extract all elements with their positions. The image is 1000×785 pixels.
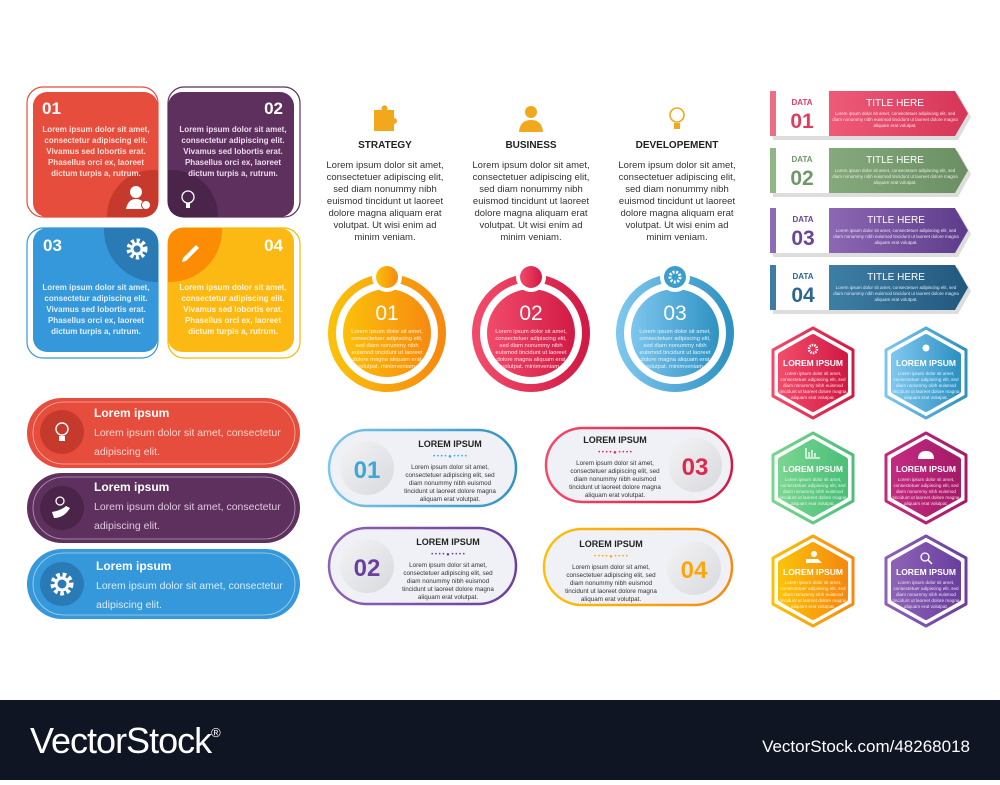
hexagon purple xyxy=(886,536,966,626)
banner 02: DATA xyxy=(791,155,813,164)
banner 01: Lorem ipsum dolor sit amet, consectetuer adipiscing elit, sed xyxy=(835,111,956,116)
circle 03: dolore magna aliquam erat xyxy=(641,357,710,363)
hexagon purple: LOREM IPSUM xyxy=(896,567,956,577)
column strategy: volutpat. Ut wisi enim ad xyxy=(334,220,436,231)
card 03: 03 xyxy=(43,236,62,255)
circle 01: volutpat. minimveniam. xyxy=(357,364,417,370)
hexagon magenta: LOREM IPSUM xyxy=(896,464,956,474)
column development: volutpat. Ut wisi enim ad xyxy=(626,220,728,231)
pill red: adipiscing elit. xyxy=(94,446,160,458)
hexagon blue: aliquam erat volutpat. xyxy=(904,395,948,400)
banner 01: diam nonummy nibh euismod tincidunt ut laoreet dolore magna xyxy=(832,117,958,122)
hexagon green: aliquam erat volutpat. xyxy=(791,501,835,506)
circle 01: consectetuer adipiscing elit, xyxy=(351,336,423,342)
column business: BUSINESS xyxy=(505,140,557,151)
hexagon blue: Lorem ipsum dolor sit amet, xyxy=(898,371,954,376)
card 03: dictum turpis a, rutrum. xyxy=(51,327,141,336)
pill 04: diam nonummy nibh euismod xyxy=(570,580,653,587)
pill 01: LOREM IPSUM xyxy=(418,439,482,449)
banner 03: DATA xyxy=(792,215,814,224)
card 01 xyxy=(26,86,159,218)
pill 03: consectetuer adipiscing elit, sed xyxy=(570,468,660,475)
hexagon purple: diam nonummy nibh euismod xyxy=(896,592,956,597)
column strategy: consectetuer adipiscing elit, xyxy=(327,172,443,183)
card 01: dictum turpis a, rutrum. xyxy=(51,169,141,178)
hexagon red: diam nonummy nibh euismod xyxy=(783,383,843,388)
circle 02: consectetuer adipiscing elit, xyxy=(495,336,567,342)
banner 02: diam nonummy nibh euismod tincidunt ut laoreet dolore magna xyxy=(832,174,958,179)
column business xyxy=(472,106,590,243)
pill 03: diam nonummy nibh euismod xyxy=(574,476,657,483)
column development: sed diam nonummy nibh xyxy=(625,184,729,195)
banner 03: Lorem ipsum dolor sit amet, consectetuer adipiscing elit, sed xyxy=(836,228,957,233)
pill red: Lorem ipsum dolor sit amet, consectetur xyxy=(94,427,281,439)
pill 03: LOREM IPSUM xyxy=(583,435,647,445)
card 04: consectetur adipiscing elit. xyxy=(181,294,285,303)
pill 02: tincidunt ut laoreet dolore magna xyxy=(402,586,494,593)
card 01: Vivamus sed lobortis erat. xyxy=(46,147,146,156)
card 02: Phasellus orci ex, laoreet xyxy=(185,158,281,167)
hexagon red: tincidunt ut laoreet dolore magna xyxy=(780,389,847,394)
footer: VectorStock xyxy=(30,720,211,761)
card 02: Lorem ipsum dolor sit amet, xyxy=(179,125,287,134)
banner 03 xyxy=(770,208,971,257)
pill 01: consectetuer adipiscing elit, sed xyxy=(405,472,495,479)
footer: ® xyxy=(211,725,221,740)
circle 01: euismod tincidunt ut laoreet xyxy=(352,350,423,356)
column development: euismod tincidunt ut laoreet xyxy=(619,196,735,207)
circle 02: euismod tincidunt ut laoreet xyxy=(496,350,567,356)
pill blue: Lorem ipsum dolor sit amet, consectetur xyxy=(96,580,283,592)
pill 01: Lorem ipsum dolor sit amet, xyxy=(411,464,489,471)
column business: consectetuer adipiscing elit, xyxy=(473,172,589,183)
panel: circles xyxy=(332,262,730,388)
card 04 xyxy=(167,227,301,359)
hexagon magenta: tincidunt ut laoreet dolore magna xyxy=(893,495,960,500)
pill 01: tincidunt ut laoreet dolore magna xyxy=(404,488,496,495)
pill blue: Lorem ipsum xyxy=(96,559,171,573)
card 02 xyxy=(167,86,301,218)
pill 04: Lorem ipsum dolor sit amet, xyxy=(572,564,650,571)
column business: dolore magna aliquam erat xyxy=(474,208,588,219)
hexagon purple: consectetuer adipiscing elit, sed xyxy=(893,586,959,591)
pill purple: Lorem ipsum xyxy=(94,480,169,494)
pill 02 xyxy=(329,528,516,604)
pill 04: • • • • ● • • • • xyxy=(594,554,628,560)
banner 04: diam nonummy nibh euismod tincidunt ut laoreet dolore magna xyxy=(833,291,959,296)
column strategy xyxy=(326,105,444,243)
card 02: Vivamus sed lobortis erat. xyxy=(183,147,283,156)
pill purple xyxy=(27,473,300,543)
hexagon blue xyxy=(886,328,966,418)
banner 02: TITLE HERE xyxy=(866,155,924,166)
banner 02: aliquam erat volutpat. xyxy=(873,180,917,185)
hexagon orange: Lorem ipsum dolor sit amet, xyxy=(785,580,841,585)
card 01: Lorem ipsum dolor sit amet, xyxy=(42,125,150,134)
banner 04: aliquam erat volutpat. xyxy=(874,297,918,302)
circle 03: volutpat. minimveniam. xyxy=(645,364,705,370)
banner 01 xyxy=(770,91,971,140)
hexagon purple: aliquam erat volutpat. xyxy=(904,604,948,609)
column business: volutpat. Ut wisi enim ad xyxy=(480,220,582,231)
panel: data banners xyxy=(770,91,971,314)
hexagon red: LOREM IPSUM xyxy=(783,358,843,368)
column strategy: minim veniam. xyxy=(354,232,416,243)
hexagon purple: Lorem ipsum dolor sit amet, xyxy=(898,580,954,585)
circle 03 xyxy=(620,262,730,388)
banner 04 xyxy=(770,265,971,314)
column business: minim veniam. xyxy=(500,232,562,243)
circle 01: Lorem ipsum dolor sit amet, xyxy=(351,329,423,335)
hexagon red: aliquam erat volutpat. xyxy=(791,395,835,400)
panel: left pills xyxy=(27,398,300,619)
card 03: Lorem ipsum dolor sit amet, xyxy=(42,283,150,292)
hexagon blue: diam nonummy nibh euismod xyxy=(896,383,956,388)
hexagon magenta: consectetuer adipiscing elit, sed xyxy=(893,483,959,488)
circle 03: Lorem ipsum dolor sit amet, xyxy=(639,329,711,335)
hexagon magenta: diam nonummy nibh euismod xyxy=(896,489,956,494)
pill 01: 01 xyxy=(354,457,380,484)
pill 04: LOREM IPSUM xyxy=(579,539,643,549)
pill 04 xyxy=(544,529,732,605)
banner 03: aliquam erat volutpat. xyxy=(874,240,918,245)
card 04: Phasellus orci ex, laoreet xyxy=(185,316,281,325)
pill 03: tincidunt ut laoreet dolore magna xyxy=(569,484,661,491)
column development: consectetuer adipiscing elit, xyxy=(619,172,735,183)
hexagon magenta: aliquam erat volutpat. xyxy=(904,501,948,506)
card 03 xyxy=(26,227,159,359)
card 02: 02 xyxy=(264,99,283,118)
circle 03: 03 xyxy=(663,302,687,325)
hexagon green: tincidunt ut laoreet dolore magna xyxy=(780,495,847,500)
pill 03: • • • • ● • • • • xyxy=(598,450,632,456)
circle 02: 02 xyxy=(519,302,543,325)
panel: three columns text xyxy=(326,105,736,243)
panel: hexagons xyxy=(773,328,966,626)
footer: VectorStock.com/48268018 xyxy=(762,737,970,756)
pill 03: Lorem ipsum dolor sit amet, xyxy=(576,460,654,467)
hexagon orange: diam nonummy nibh euismod xyxy=(783,592,843,597)
hexagon magenta: Lorem ipsum dolor sit amet, xyxy=(898,477,954,482)
circle 02: sed diam nonummy nibh xyxy=(499,343,563,349)
card 02: dictum turpis a, rutrum. xyxy=(188,169,278,178)
pill 03: aliquam erat volutpat. xyxy=(585,492,645,499)
pill 01: diam nonummy nibh euismod xyxy=(409,480,492,487)
card 03: consectetur adipiscing elit. xyxy=(44,294,148,303)
banner 04: DATA xyxy=(792,272,814,281)
card 03: Vivamus sed lobortis erat. xyxy=(46,305,146,314)
column strategy: sed diam nonummy nibh xyxy=(333,184,437,195)
circle 01: dolore magna aliquam erat xyxy=(353,357,422,363)
circle 02: volutpat. minimveniam. xyxy=(501,364,561,370)
banner 02: Lorem ipsum dolor sit amet, consectetuer adipiscing elit, sed xyxy=(835,168,956,173)
card 04: Vivamus sed lobortis erat. xyxy=(183,305,283,314)
hexagon blue: tincidunt ut laoreet dolore magna xyxy=(893,389,960,394)
banner 04: Lorem ipsum dolor sit amet, consectetuer adipiscing elit, sed xyxy=(836,285,957,290)
pill 01 xyxy=(329,430,516,506)
circle 03: euismod tincidunt ut laoreet xyxy=(640,350,711,356)
circle 02 xyxy=(476,262,586,388)
pill 04: aliquam erat volutpat. xyxy=(581,596,641,603)
banner 01: aliquam erat volutpat. xyxy=(873,123,917,128)
pill red xyxy=(27,398,300,468)
circle 01 xyxy=(332,262,442,388)
pill 02: • • • • ● • • • • xyxy=(431,552,465,558)
card 03: Phasellus orci ex, laoreet xyxy=(48,316,144,325)
hexagon green xyxy=(773,433,853,523)
hexagon red: consectetuer adipiscing elit, sed xyxy=(780,377,846,382)
banner 01: DATA xyxy=(791,98,813,107)
column development: Lorem ipsum dolor sit amet, xyxy=(618,160,736,171)
banner 04: TITLE HERE xyxy=(867,272,925,283)
circle 03: consectetuer adipiscing elit, xyxy=(639,336,711,342)
circle 02: dolore magna aliquam erat xyxy=(497,357,566,363)
hexagon purple: tincidunt ut laoreet dolore magna xyxy=(893,598,960,603)
hexagon green: diam nonummy nibh euismod xyxy=(783,489,843,494)
pill purple: adipiscing elit. xyxy=(94,520,160,532)
banner 03: diam nonummy nibh euismod tincidunt ut laoreet dolore magna xyxy=(833,234,959,239)
banner 03: TITLE HERE xyxy=(867,215,925,226)
pill 02: LOREM IPSUM xyxy=(416,537,480,547)
pill 04: 04 xyxy=(681,557,708,584)
pill 03: 03 xyxy=(682,454,708,481)
column strategy: Lorem ipsum dolor sit amet, xyxy=(326,160,444,171)
pill 02: consectetuer adipiscing elit, sed xyxy=(403,570,493,577)
hexagon orange: consectetuer adipiscing elit, sed xyxy=(780,586,846,591)
banner 01: TITLE HERE xyxy=(866,98,924,109)
pill 02: 02 xyxy=(354,555,380,582)
banner 02 xyxy=(770,148,971,197)
circle 02: Lorem ipsum dolor sit amet, xyxy=(495,329,567,335)
pill 03 xyxy=(546,428,732,502)
card 04: dictum turpis a, rutrum. xyxy=(188,327,278,336)
pill 04: tincidunt ut laoreet dolore magna xyxy=(565,588,657,595)
card 04: Lorem ipsum dolor sit amet, xyxy=(179,283,287,292)
pill 01: aliquam erat volutpat. xyxy=(420,496,480,503)
hexagon orange: aliquam erat volutpat. xyxy=(791,604,835,609)
column development: minim veniam. xyxy=(646,232,708,243)
banner 02: 02 xyxy=(790,167,814,190)
card 01: consectetur adipiscing elit. xyxy=(44,136,148,145)
footer xyxy=(0,700,1000,780)
column business: Lorem ipsum dolor sit amet, xyxy=(472,160,590,171)
circle 03: sed diam nonummy nibh xyxy=(643,343,707,349)
card 01: Phasellus orci ex, laoreet xyxy=(48,158,144,167)
column development: DEVELOPEMENT xyxy=(636,140,718,151)
column development: dolore magna aliquam erat xyxy=(620,208,734,219)
hexagon blue: LOREM IPSUM xyxy=(896,358,956,368)
hexagon green: consectetuer adipiscing elit, sed xyxy=(780,483,846,488)
column business: sed diam nonummy nibh xyxy=(479,184,583,195)
card 02: consectetur adipiscing elit. xyxy=(181,136,285,145)
hexagon orange xyxy=(773,536,853,626)
hexagon green: LOREM IPSUM xyxy=(783,464,843,474)
pill 02: aliquam erat volutpat. xyxy=(418,594,478,601)
pill blue: adipiscing elit. xyxy=(96,599,162,611)
column strategy: euismod tincidunt ut laoreet xyxy=(327,196,443,207)
column strategy: STRATEGY xyxy=(358,140,412,151)
pill 04: consectetuer adipiscing elit, sed xyxy=(566,572,656,579)
circle 01: 01 xyxy=(375,302,399,325)
hexagon green: Lorem ipsum dolor sit amet, xyxy=(785,477,841,482)
banner 04: 04 xyxy=(791,284,815,307)
hexagon red: Lorem ipsum dolor sit amet, xyxy=(785,371,841,376)
card 01: 01 xyxy=(42,99,61,118)
column business: euismod tincidunt ut laoreet xyxy=(473,196,589,207)
hexagon red xyxy=(773,328,853,418)
pill purple: Lorem ipsum dolor sit amet, consectetur xyxy=(94,501,281,513)
hexagon orange: LOREM IPSUM xyxy=(783,567,843,577)
circle 01: sed diam nonummy nibh xyxy=(355,343,419,349)
column strategy: dolore magna aliquam erat xyxy=(328,208,442,219)
panel: middle pills xyxy=(329,428,732,605)
column development xyxy=(618,108,736,243)
pill 01: • • • • ● • • • • xyxy=(433,454,467,460)
card 04: 04 xyxy=(264,236,284,255)
pill red: Lorem ipsum xyxy=(94,406,169,420)
pill 02: Lorem ipsum dolor sit amet, xyxy=(409,562,487,569)
hexagon blue: consectetuer adipiscing elit, sed xyxy=(893,377,959,382)
hexagon magenta xyxy=(886,433,966,523)
pill 02: diam nonummy nibh euismod xyxy=(407,578,490,585)
banner 03: 03 xyxy=(791,227,815,250)
pill blue xyxy=(27,549,300,619)
banner 01: 01 xyxy=(790,110,814,133)
panel: square cards xyxy=(27,87,300,358)
hexagon orange: tincidunt ut laoreet dolore magna xyxy=(780,598,847,603)
